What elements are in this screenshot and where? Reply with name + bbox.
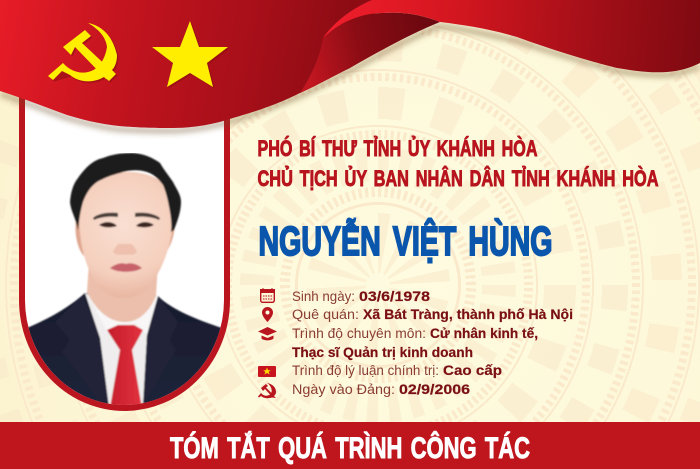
hair: [70, 153, 181, 232]
top ribbon: left flag: [0, 0, 375, 128]
top ribbon: right band: [323, 0, 700, 72]
political theory: Cao cấp: [443, 363, 502, 378]
hammer and sickle shape: [48, 23, 117, 81]
icon: star: [152, 21, 230, 88]
nose: [113, 244, 137, 255]
icon: hammer and sickle: [48, 23, 118, 83]
collar: [98, 295, 159, 334]
icon: graduation cap: [258, 327, 277, 340]
ribbon shadow: [0, 26, 700, 131]
title lines: [258, 136, 659, 191]
icon: calendar: [260, 288, 275, 302]
birth date: 03/6/1978: [359, 289, 431, 304]
hometown: Quê quán:: [292, 307, 359, 322]
party date: 02/9/2006: [399, 382, 471, 397]
star shape: [152, 21, 228, 87]
star shadow: [154, 22, 230, 88]
frame border: [22, 85, 227, 408]
suit: [28, 292, 220, 403]
eyes: [99, 222, 154, 227]
ears: [74, 220, 175, 256]
top ribbon: dark fold: [300, 13, 440, 93]
political theory: Trình độ lý luận chính trị:: [292, 363, 439, 378]
education line 2: Thạc sĩ Quản trị kinh doanh: [292, 345, 473, 360]
tie: [107, 325, 143, 408]
education: Cử nhân kinh tế,: [430, 326, 538, 341]
portrait photo: [28, 153, 220, 405]
party date: [292, 382, 471, 397]
bottom banner: [0, 422, 700, 469]
mouth: [110, 263, 142, 272]
face: [79, 172, 172, 298]
lapels: [55, 295, 109, 408]
name: NGUYỄN VIỆT HÙNG: [258, 218, 552, 264]
icon: small hammer and sickle: [258, 383, 276, 398]
birth date: Sinh ngày:: [292, 289, 355, 304]
banner heading: TÓM TẮT QUÁ TRÌNH CÔNG TÁC: [170, 431, 530, 465]
title line 1: PHÓ BÍ THƯ TỈNH ỦY KHÁNH HÒA: [258, 136, 538, 161]
icon: flag: [258, 366, 276, 377]
hometown: Xã Bát Tràng, thành phố Hà Nội: [363, 307, 573, 322]
education: Trình độ chuyên môn:: [292, 326, 426, 341]
education: [292, 326, 538, 341]
hammer and sickle shadow: [50, 24, 118, 83]
neck: [87, 262, 158, 322]
portrait frame: [20, 85, 230, 412]
info icons: [258, 288, 277, 398]
eyebrows: [93, 213, 160, 220]
party date: Ngày vào Đảng:: [292, 382, 395, 397]
birth date: [292, 289, 431, 304]
info list: [292, 289, 573, 397]
icon: location pin: [262, 307, 273, 322]
shirt: [84, 292, 148, 404]
